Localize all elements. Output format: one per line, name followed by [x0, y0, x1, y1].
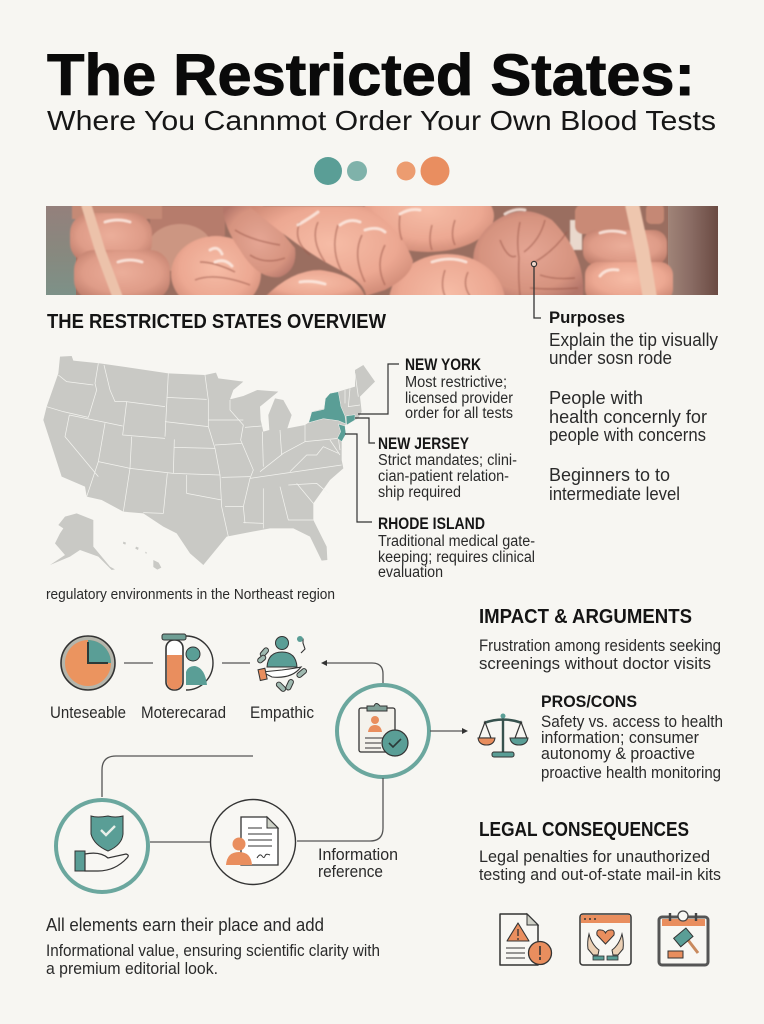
labels: top icon row: Unteseable — [50, 703, 126, 722]
panel: purposes: intermediate level — [549, 484, 680, 504]
label: information reference: reference — [318, 862, 383, 881]
callout: Rhode Island: evaluation — [378, 564, 443, 581]
image pin — [531, 261, 537, 267]
callout: New York: licensed provider — [405, 390, 513, 407]
text: pros and cons: PROS/CONS — [541, 692, 637, 711]
text: pros and cons: autonomy & proactive — [541, 745, 695, 763]
subtitle: Where You Cannmot Order Your Own Blood Tests — [47, 105, 716, 136]
chart: US map — [43, 356, 375, 570]
icon: browser with caring hands — [580, 914, 631, 965]
text: pros and cons: information; consumer — [541, 729, 699, 747]
panel: purposes: People with — [549, 388, 643, 408]
text: impact: Frustration among residents seeking — [479, 636, 721, 655]
callout: Rhode Island: Traditional medical gate- — [378, 533, 535, 550]
icon: clipboard check circle — [337, 685, 429, 777]
callout: New York: order for all tests — [405, 405, 513, 422]
connector: clipboard to document — [297, 778, 383, 841]
labels: top icon row — [50, 703, 314, 722]
callout: New York: Most restrictive; — [405, 374, 507, 391]
icon: calendar with gavel — [659, 911, 708, 965]
panel: purposes: under sosn rode — [549, 348, 672, 368]
text: closing note: All elements earn their place and add — [46, 915, 324, 935]
panel: purposes: Purposes — [549, 308, 625, 327]
heading: overview: THE RESTRICTED STATES OVERVIEW — [47, 310, 387, 333]
icon: scales — [478, 714, 528, 757]
heading: impact and arguments: IMPACT & ARGUMENTS — [479, 605, 692, 628]
callout: Rhode Island: keeping; requires clinical — [378, 549, 535, 566]
labels: top icon row: Empathic — [250, 703, 314, 722]
callout: Rhode Island — [345, 434, 535, 581]
labels: top icon row: Moterecarad — [141, 703, 226, 722]
text: pros and cons — [541, 692, 723, 782]
panel: purposes: people with concerns — [549, 425, 706, 445]
decorative dots — [314, 156, 450, 186]
connector: shield upward — [102, 756, 253, 797]
connector: document to shield — [150, 841, 210, 843]
text: closing note: a premium editorial look. — [46, 959, 218, 978]
text: impact — [479, 636, 721, 673]
icon: clock — [61, 636, 115, 690]
map caption: regulatory environments in the Northeast region — [46, 587, 335, 603]
text: impact: screenings without doctor visits — [479, 654, 711, 673]
image: intestine banner — [46, 206, 718, 295]
callout: New York — [358, 355, 513, 422]
callout: Rhode Island: RHODE ISLAND — [378, 514, 485, 533]
callout: New Jersey: Strict mandates; clini- — [378, 452, 517, 469]
label: information reference: Information — [318, 845, 398, 864]
icon: test tube and person — [162, 634, 213, 690]
icon: shield in hand circle — [56, 800, 148, 892]
text: legal: testing and out-of-state mail-in kits — [479, 865, 721, 884]
text: legal: Legal penalties for unauthorized — [479, 847, 710, 866]
icon: warning document — [500, 914, 552, 965]
icon: document and person — [210, 800, 296, 884]
icon: empathic care — [257, 636, 308, 692]
arrow: to empathic — [321, 660, 383, 684]
heading: legal consequences: LEGAL CONSEQUENCES — [479, 818, 689, 841]
label: information reference — [318, 845, 398, 881]
callout: New Jersey: ship required — [378, 484, 461, 501]
arrow: to pros/cons — [430, 728, 468, 734]
text: closing note — [46, 915, 380, 978]
panel: purposes: Explain the tip visually — [549, 330, 718, 350]
callout: New Jersey: NEW JERSEY — [378, 434, 470, 453]
panel: purposes: health concernly for — [549, 407, 707, 427]
callout: New Jersey: cian-patient relation- — [378, 468, 509, 485]
text: pros and cons: Safety vs. access to health — [541, 713, 723, 731]
panel: purposes — [534, 267, 718, 504]
title: The Restricted States: — [47, 43, 695, 108]
text: pros and cons: proactive health monitoring — [541, 764, 721, 782]
callout: New Jersey — [355, 418, 517, 501]
text: closing note: Informational value, ensuring scientific clarity with — [46, 941, 380, 960]
callout: New York: NEW YORK — [405, 355, 482, 374]
panel: purposes: Beginners to to — [549, 465, 670, 485]
text: legal — [479, 847, 721, 884]
